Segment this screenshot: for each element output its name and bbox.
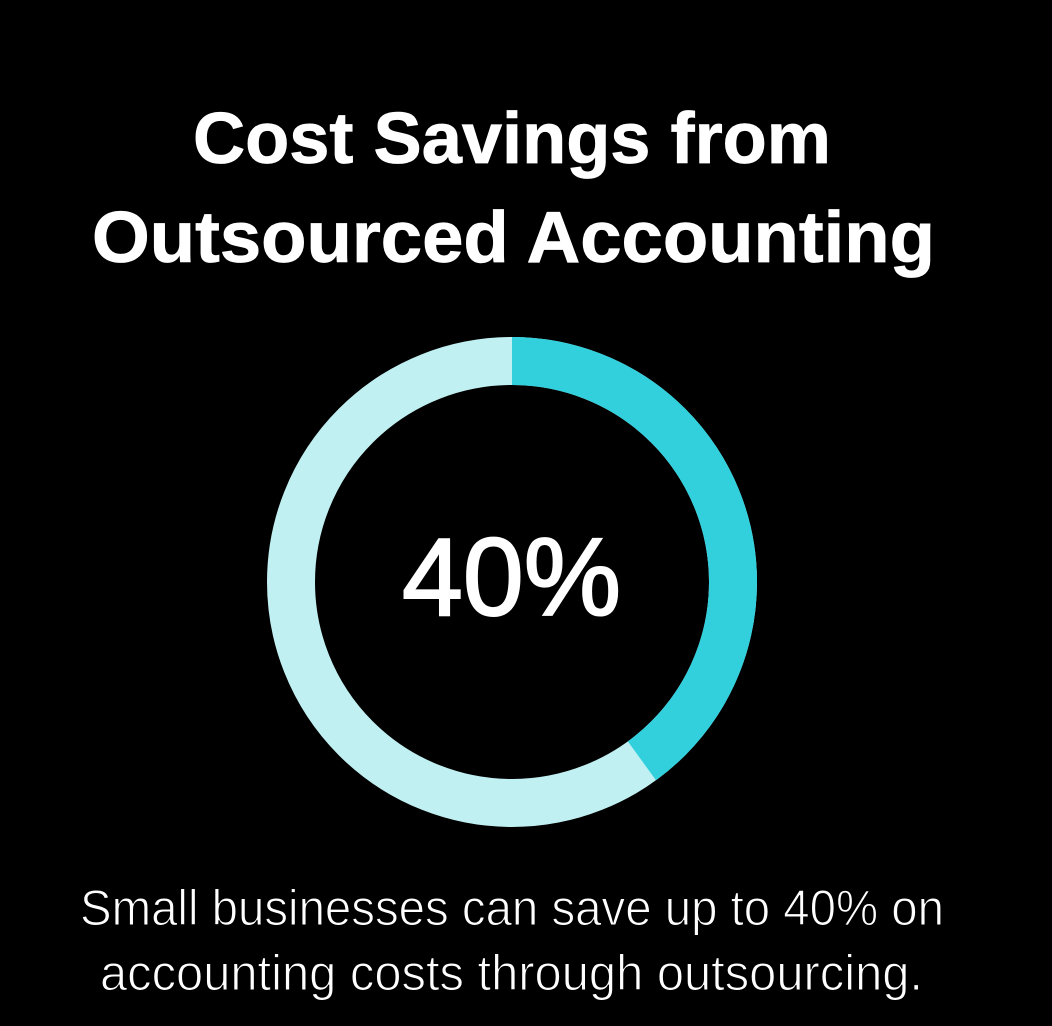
donut chart: 40% [291,361,733,803]
title [92,99,935,278]
center value: 40% [402,516,621,639]
title: Cost Savings from [193,99,831,179]
caption [80,880,944,1001]
remaining share ring [291,361,733,803]
highlighted 40% arc [512,361,733,761]
caption: accounting costs through outsourcing. [100,945,923,1001]
title: Outsourced Accounting [92,198,935,278]
caption: Small businesses can save up to 40% on [80,880,944,936]
